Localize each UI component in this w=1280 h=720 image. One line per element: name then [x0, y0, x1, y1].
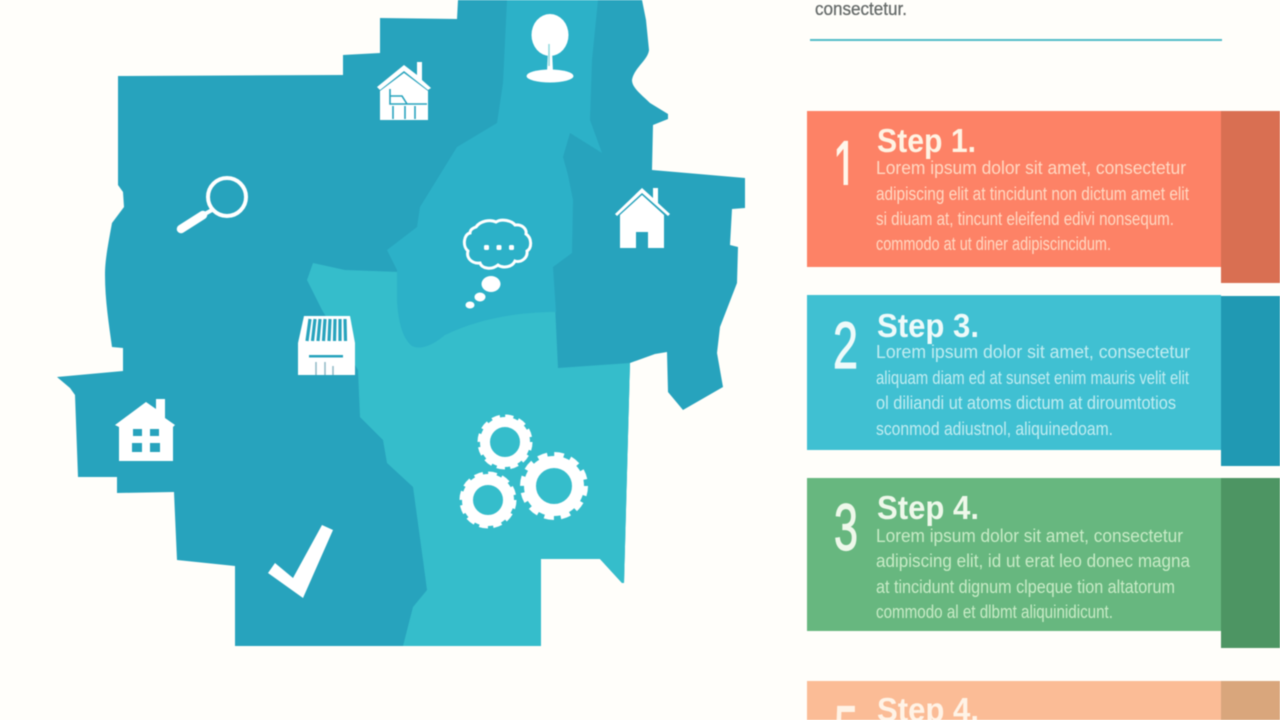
tab: step 3: [1221, 478, 1280, 648]
icon: house with windows: [115, 399, 175, 461]
number 2: 2: [833, 308, 858, 382]
number 1: 1: [833, 127, 857, 208]
heading: step 4: Step 4.: [877, 489, 979, 526]
body: step 1: Lorem ipsum dolor sit amet, consectetur: [876, 158, 1186, 178]
body: step 1: si diuam at, tincunt eleifend edivi nonsequm.: [876, 209, 1174, 229]
body: step 2: [876, 342, 1190, 439]
tab: step 2: [1221, 296, 1280, 466]
panel: step 3: [807, 478, 1280, 648]
map with icons: [57, 0, 745, 646]
number 3: 3: [834, 490, 858, 564]
panel: step 2: [807, 295, 1280, 466]
body: step 2: ol diliandi ut atoms dictum at diroumtotios: [876, 393, 1176, 413]
heading: step 1: Step 1.: [877, 122, 976, 159]
tab: step 1: [1221, 111, 1280, 283]
body: step 3: adipiscing elit, id ut erat leo donec magna: [876, 551, 1191, 571]
panel: step 4: [807, 681, 1280, 720]
map region: lower light: [307, 263, 630, 646]
tab: step 4: [1221, 681, 1280, 720]
heading: step 3: Step 3.: [877, 307, 979, 344]
body: step 1: commodo at ut diner adipiscincidum.: [876, 234, 1111, 254]
icon: check mark: [268, 525, 333, 598]
body: step 3: [876, 526, 1191, 622]
map region: middle lighter strip: [387, 0, 602, 348]
panel: step 1: [807, 111, 1280, 283]
icon: house with floor plan: [377, 62, 431, 120]
body: step 2: sconmod adiustnol, aliquinedoam.: [876, 419, 1113, 439]
map region: dark base: [57, 0, 745, 646]
body: step 2: aliquam diam ed at sunset enim mauris velit elit: [876, 368, 1189, 388]
body: step 3: commodo al et dlbmt aliquinidicunt.: [876, 602, 1113, 622]
icon: shop: [298, 316, 355, 375]
body: step 3: Lorem ipsum dolor sit amet, consectetur: [876, 526, 1183, 546]
body: step 2: Lorem ipsum dolor sit amet, consectetur: [876, 342, 1190, 362]
body: step 1: adipiscing elit at tincidunt non dictum amet elit: [876, 184, 1189, 204]
icon: magnifying glass: [181, 178, 246, 229]
icon: gears: [462, 417, 585, 526]
icon: simple house: [615, 188, 670, 248]
body: step 3: at tincidunt dignum clpeque tion altatorum: [876, 577, 1175, 597]
body: step 1: [876, 158, 1189, 254]
icon: tree: [526, 14, 574, 82]
icon: thought bubble: [464, 220, 531, 308]
